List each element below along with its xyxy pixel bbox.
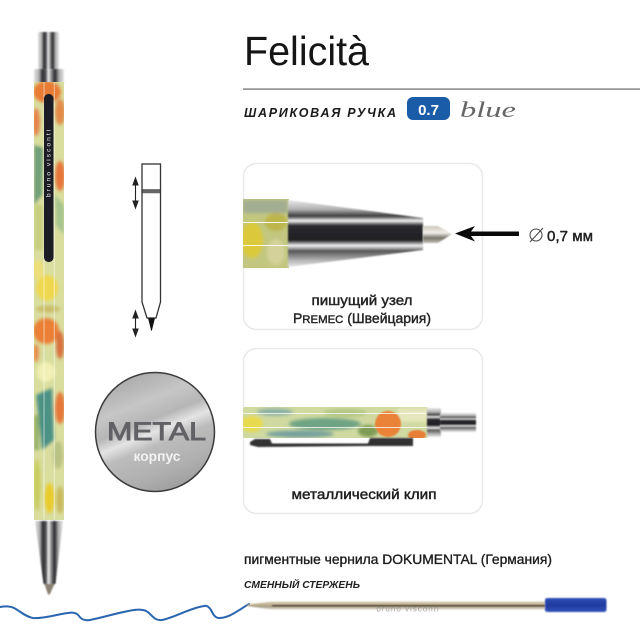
pen name plate: bruno visconti [46, 129, 53, 197]
ink colour: blue: blue [460, 97, 516, 122]
refill brand text: bruno visconti [376, 604, 440, 614]
text: replaceable refill: СМЕННЫЙ СТЕРЖЕНЬ [244, 578, 361, 591]
retracted tip [148, 318, 155, 331]
badge word korpus: корпус [134, 449, 181, 464]
outline of pen button and body [142, 164, 160, 318]
text: pigment ink: пигментные чернила DOKUMENTAL (Германия) [244, 551, 552, 567]
pen push button [38, 32, 59, 70]
pen collar [34, 69, 64, 83]
badge word METAL: METAL [107, 418, 206, 446]
pen name plate [44, 94, 54, 262]
subtitle: ballpoint pen: ШАРИКОВАЯ РУЧКА [244, 106, 396, 120]
badge: metal body [96, 372, 214, 492]
label: tip diameter: 0,7 мм [547, 228, 593, 245]
badge: tip size 0.7: 0.7 [418, 102, 439, 119]
header divider [243, 88, 640, 90]
badge: tip size 0.7 [407, 97, 450, 120]
pen tip cone [35, 521, 63, 595]
diameter symbol [530, 228, 543, 242]
title: Felicità [244, 28, 369, 74]
caption: writing tip: пишущий узел [312, 293, 412, 308]
tip photo [241, 199, 452, 268]
arrow: button travel [133, 178, 138, 208]
panel: writing tip [241, 164, 519, 330]
caption: Premec: PREMEC (Швейцария) [293, 311, 431, 326]
refill blue cap [545, 598, 606, 612]
pen: full product view [32, 32, 65, 595]
arrow: tip travel [133, 311, 138, 336]
arrow to tip [455, 226, 519, 242]
pen floral body [32, 81, 65, 520]
diagram: retractable pen mechanism [133, 164, 160, 336]
caption: metal clip: металлический клип [292, 486, 436, 502]
clip photo [241, 407, 476, 447]
subtitle row [244, 97, 516, 122]
squiggle: blue ink line [0, 604, 249, 620]
refill [247, 598, 606, 614]
panel: metal clip [241, 348, 482, 514]
